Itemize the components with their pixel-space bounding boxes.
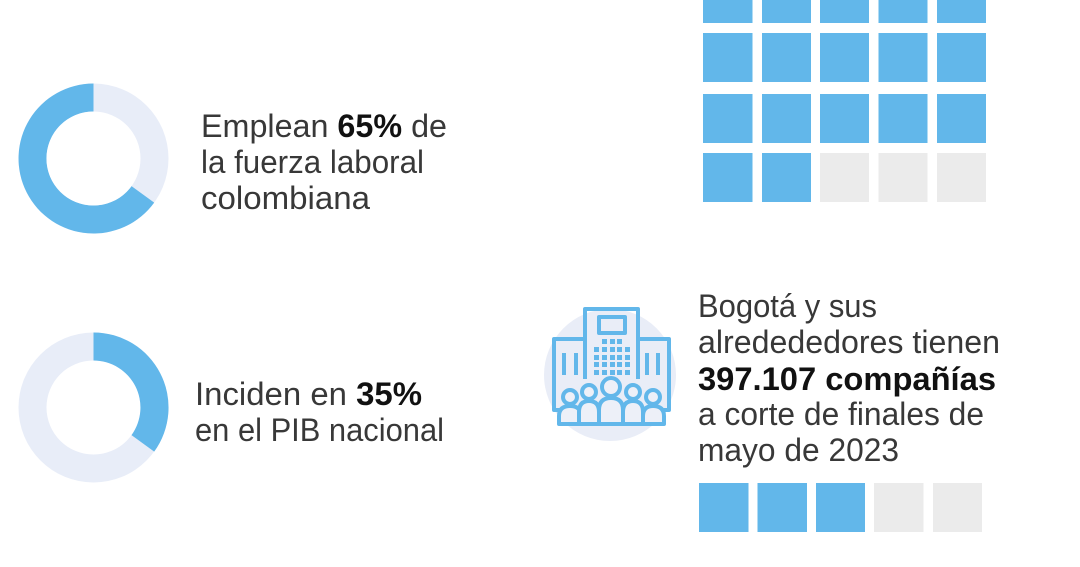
text: labor force: colombiana: [201, 180, 370, 216]
text: labor force: la fuerza laboral: [201, 144, 424, 180]
text: GDP: Inciden en 35%: [195, 376, 422, 412]
text: labor force: [201, 108, 447, 216]
text: companies in Bogotá: alredededores tienen: [698, 324, 1000, 360]
text: companies in Bogotá: 397.107 compañías: [698, 361, 996, 397]
waffle chart: top: [703, 0, 986, 202]
donut chart: 35%: [18, 332, 169, 482]
donut chart: 65%: [18, 84, 168, 234]
waffle chart: bottom: [699, 483, 982, 532]
text: companies in Bogotá: [698, 288, 1000, 468]
text: GDP: [195, 376, 444, 448]
icon: buildings and people: [544, 309, 676, 441]
text: labor force: Emplean 65% de: [201, 108, 447, 144]
text: companies in Bogotá: Bogotá y sus: [698, 288, 877, 324]
text: GDP: en el PIB nacional: [195, 412, 444, 448]
text: companies in Bogotá: mayo de 2023: [698, 432, 899, 468]
text: companies in Bogotá: a corte de finales de: [698, 396, 984, 432]
